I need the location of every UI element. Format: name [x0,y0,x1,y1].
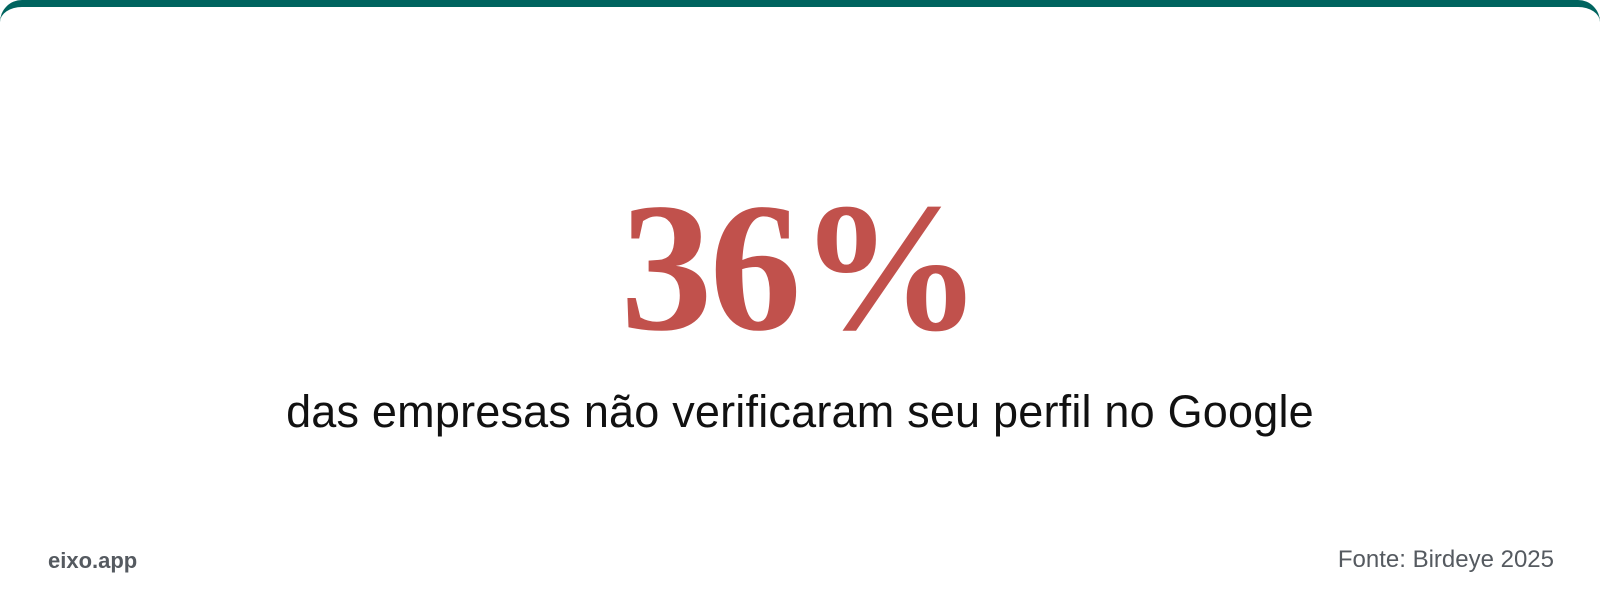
brand footer: eixo.app [48,548,137,573]
source footer: Fonte: Birdeye 2025 [1338,546,1554,573]
big statistic: 36% [620,165,980,369]
subtitle text: das empresas não verificaram seu perfil no Google [286,386,1314,437]
